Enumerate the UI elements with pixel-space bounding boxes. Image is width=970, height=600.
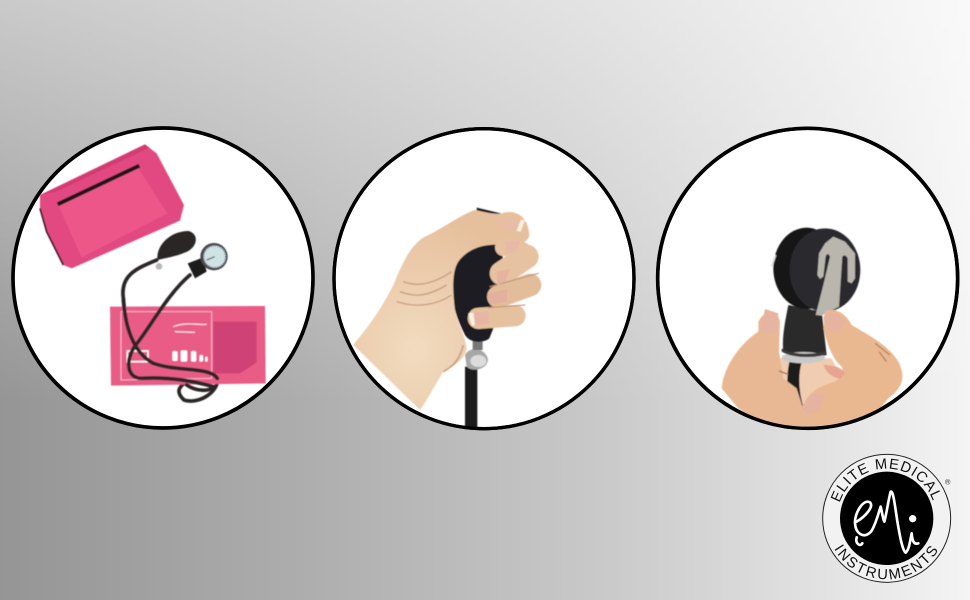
circle frame xyxy=(13,128,313,428)
carrying bag xyxy=(40,144,184,268)
logo black disc xyxy=(840,472,933,565)
tubing xyxy=(123,260,217,401)
tube xyxy=(793,360,803,420)
metal clip xyxy=(816,237,855,316)
black bulb xyxy=(452,208,505,342)
cuff people icons xyxy=(172,350,208,362)
logo registered mark: ® xyxy=(945,477,951,486)
logo monogram xyxy=(855,492,918,553)
chestpiece head xyxy=(772,228,860,312)
cuff xyxy=(110,306,266,386)
panel: chestpiece clip held in fingers xyxy=(658,128,958,432)
frame edge over hand xyxy=(334,129,634,429)
fingers xyxy=(478,247,538,318)
logo: Elite Medical Instruments xyxy=(822,454,952,583)
panel: blood pressure kit xyxy=(13,128,313,428)
gauge xyxy=(188,243,228,278)
tube and valve xyxy=(465,340,488,432)
tubing over cuff xyxy=(123,275,217,390)
chestpiece stem xyxy=(782,305,827,363)
panel: hand squeezing bulb xyxy=(334,129,634,432)
fingernails xyxy=(468,218,525,326)
palm behind tube xyxy=(780,358,839,406)
frame edge over hands xyxy=(658,128,958,428)
circle frame xyxy=(658,128,958,428)
left hand xyxy=(722,309,808,432)
right hand xyxy=(798,310,902,430)
logo curved text bottom: INSTRUMENTS xyxy=(834,544,938,580)
circle frame xyxy=(334,129,634,429)
inflation bulb xyxy=(156,231,196,270)
logo curved text top: ELITE MEDICAL xyxy=(830,458,940,502)
logo outer ring xyxy=(823,454,951,582)
hand xyxy=(353,210,529,410)
logo i dot xyxy=(909,515,916,522)
